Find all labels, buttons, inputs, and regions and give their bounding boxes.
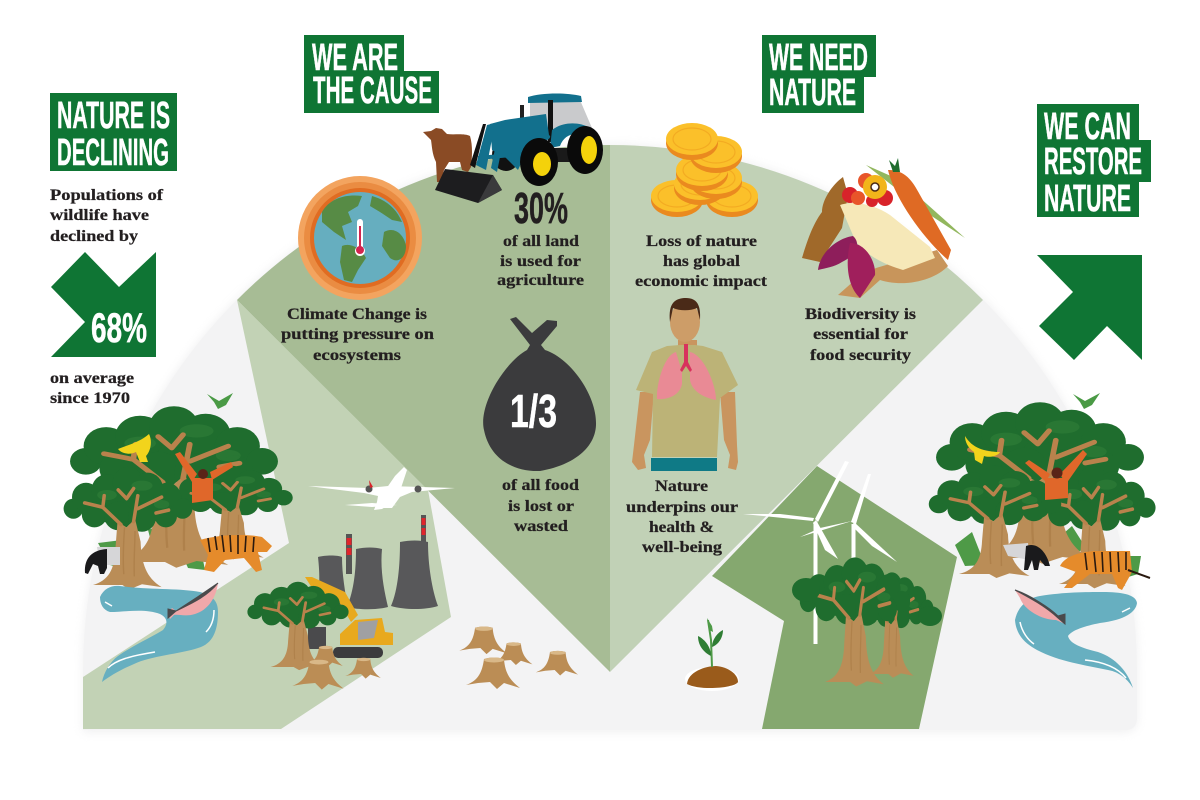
heading: nature is declining: DECLINING: [57, 132, 169, 174]
text: nature underpins: underpins our: [626, 499, 738, 516]
text: loss of nature: has global: [663, 253, 741, 270]
text: on average since 1970: [50, 370, 134, 407]
text: on average since 1970: since 1970: [50, 390, 130, 407]
text: nature underpins: [626, 478, 738, 556]
text: loss of nature: Loss of nature: [646, 233, 757, 250]
text: nature underpins: well-being: [642, 539, 722, 556]
icon: person with lungs: [632, 298, 738, 471]
text: of all food: of all food: [502, 477, 579, 494]
heading: we need nature: WE NEED: [769, 37, 868, 79]
text: biodiversity: essential for: [813, 326, 908, 343]
text: populations of wildlife: [50, 187, 164, 245]
icon: rubbish bag: [483, 317, 596, 471]
text: populations of wildlife: Populations of: [50, 187, 164, 204]
icon: tiger: [1060, 551, 1150, 590]
icon: rubbish bag: 1/3: [510, 385, 557, 437]
semicircle background: [83, 145, 1137, 732]
icon: globe with thermometer: [298, 176, 422, 300]
heading: we are the cause: WE ARE: [312, 37, 398, 79]
icon: salmon: [168, 583, 218, 619]
text: of all land: [497, 233, 584, 289]
icon: green bird: [1073, 393, 1100, 409]
heading: we are the cause: THE CAUSE: [313, 70, 432, 112]
text: climate change: [281, 306, 434, 364]
icon: tapir: [1003, 543, 1050, 570]
heading: we can restore nature: [1037, 104, 1151, 220]
text: climate change: putting pressure on: [281, 326, 434, 343]
text: nature underpins: Nature: [655, 478, 708, 495]
text: nature underpins: health &: [649, 519, 714, 536]
arrow: 68% decline: 68%: [91, 304, 147, 351]
illustration: right forest: [929, 393, 1156, 688]
text: populations of wildlife: wildlife have: [50, 207, 149, 224]
heading: nature is declining: NATURE IS: [57, 95, 170, 137]
icon: orangutan: [1025, 450, 1087, 500]
text: loss of nature: [635, 233, 768, 290]
text: 30 percent: 30%: [514, 184, 568, 233]
icon: yellow bird: [965, 436, 1000, 464]
text: climate change: Climate Change is: [287, 306, 427, 323]
text: populations of wildlife: declined by: [50, 228, 138, 245]
icon: cow: [423, 128, 472, 182]
illustration: tree stumps: [459, 626, 578, 689]
text: climate change: ecosystems: [313, 347, 401, 364]
heading: we need nature: NATURE: [769, 72, 856, 114]
text: of all land: is used for: [500, 253, 581, 270]
icon: salmon: [1015, 590, 1065, 624]
icon: green bird: [207, 393, 233, 409]
icon: plant leaves: [955, 526, 1141, 578]
icon: food crops: [802, 158, 965, 298]
arrow: 68% decline: [51, 252, 156, 357]
icon: tapir: [85, 547, 120, 574]
icon: yellow bird: [118, 434, 151, 462]
arrow: restore up: [1037, 255, 1142, 360]
text: of all food: is lost or: [508, 498, 574, 515]
icon: tractor: [435, 93, 603, 203]
text: biodiversity: Biodiversity is: [805, 306, 916, 323]
illustration: wind turbines and new trees: [743, 461, 942, 687]
text: biodiversity: food security: [810, 347, 911, 364]
text: loss of nature: economic impact: [635, 273, 768, 290]
panel: restored land: [712, 466, 957, 729]
icon: coins: [651, 123, 758, 217]
icon: orangutan: [175, 452, 233, 503]
heading: we are the cause: [304, 35, 439, 113]
illustration: left forest: [64, 393, 293, 682]
icon: tiger: [200, 535, 272, 572]
icon: plant leaves: [98, 520, 205, 570]
text: biodiversity: [805, 306, 916, 364]
icon: river: [1015, 592, 1137, 688]
text: of all land: of all land: [503, 233, 579, 250]
icon: seedling: [685, 618, 739, 691]
icon: river: [100, 586, 218, 682]
heading: we can restore nature: NATURE: [1044, 178, 1131, 220]
text: of all land: agriculture: [497, 272, 584, 289]
panel: we are the cause sector: [237, 145, 610, 672]
illustration: power station: [316, 515, 438, 610]
heading: nature is declining: [50, 93, 177, 174]
illustration: aeroplane: [308, 467, 455, 510]
text: of all food: wasted: [514, 518, 568, 535]
panel: we need nature sector: [610, 145, 983, 672]
text: on average since 1970: on average: [50, 370, 134, 387]
panel: degraded land: [83, 300, 451, 729]
heading: we can restore nature: WE CAN: [1044, 106, 1131, 148]
illustration: excavator and felled trees: [247, 577, 393, 690]
text: of all food: [502, 477, 579, 535]
heading: we need nature: [762, 35, 876, 114]
